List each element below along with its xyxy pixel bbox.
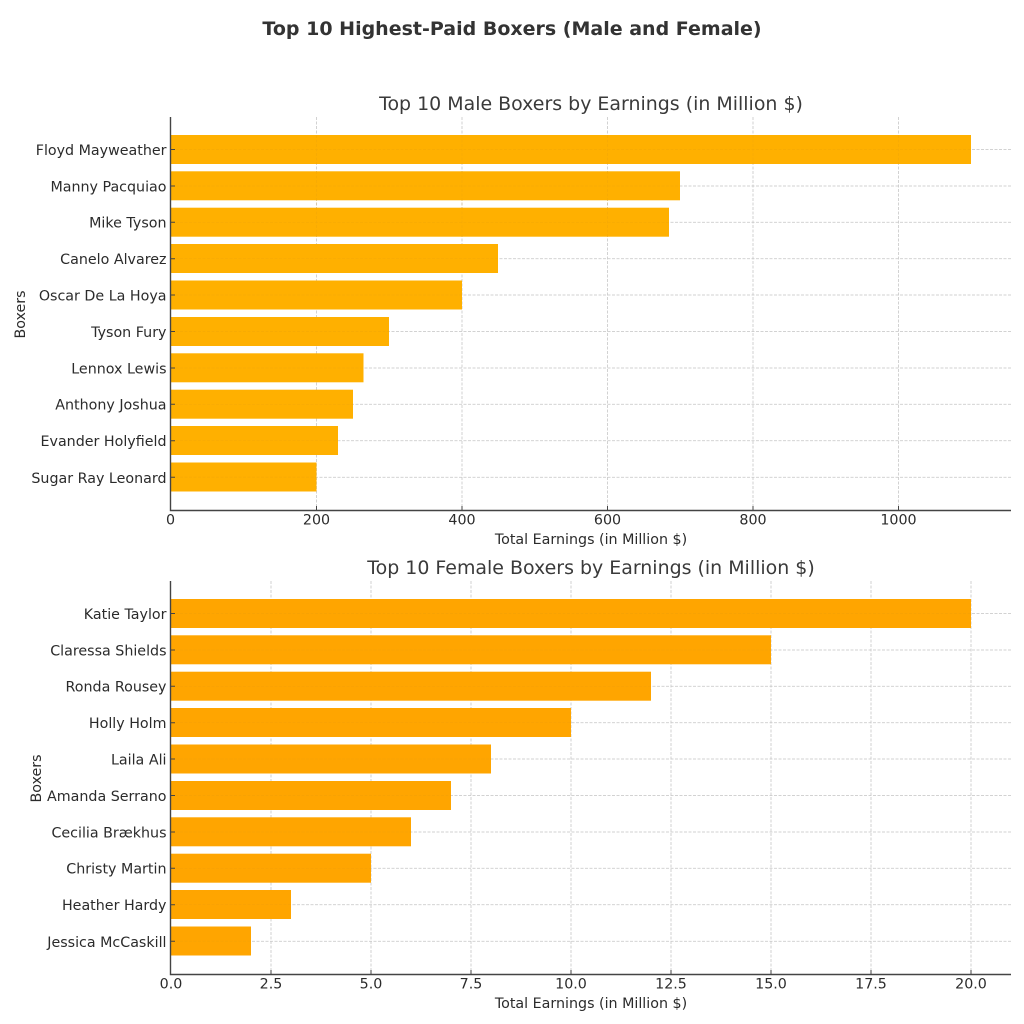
boxer labels: male: Canelo Alvarez <box>60 252 166 268</box>
x-axis tick labels: male: 600 <box>594 512 621 528</box>
x-axis tick labels: male: 800 <box>739 512 767 528</box>
boxer labels: male: Tyson Fury <box>90 325 167 341</box>
boxer labels: female: Christy Martin <box>66 862 166 878</box>
boxer labels: female: Heather Hardy <box>62 898 167 914</box>
boxer labels: male: Sugar Ray Leonard <box>31 471 166 487</box>
x-axis title: female: Total Earnings (in Million $) <box>494 996 687 1012</box>
x-axis tick labels: female: 5.0 <box>360 976 382 992</box>
boxer labels: male: Mike Tyson <box>89 216 166 232</box>
x-axis tick labels: female: 10.0 <box>555 976 587 992</box>
boxer labels: female: Ronda Rousey <box>66 680 167 696</box>
boxer labels: male: Oscar De La Hoya <box>39 288 166 304</box>
panel: female boxers chart <box>29 557 1011 1012</box>
bars: female earnings <box>171 599 971 956</box>
boxer labels: male: Floyd Mayweather <box>36 143 167 159</box>
boxer labels: female: Laila Ali <box>111 752 166 768</box>
y-axis title: female: Boxers <box>29 754 45 803</box>
x-axis tick labels: male: 200 <box>303 512 330 528</box>
x-axis tick labels: female: 17.5 <box>855 976 887 992</box>
heading: female chart: Top 10 Female Boxers by Earnings (in Million $) <box>366 557 815 579</box>
x-axis tick labels: male: 0 <box>166 512 175 528</box>
x-axis tick labels: female: 7.5 <box>460 976 482 992</box>
boxer labels: male: Anthony Joshua <box>55 398 166 414</box>
boxer labels: female: Cecilia Brækhus <box>51 825 166 841</box>
boxer labels: female <box>46 607 167 951</box>
x-axis tick labels: female: 15.0 <box>755 976 787 992</box>
boxer labels: female: Amanda Serrano <box>47 789 166 805</box>
bars: male earnings <box>171 135 971 492</box>
boxer labels: male <box>31 143 167 487</box>
x-axis tick labels: male <box>166 512 917 528</box>
boxer labels: male: Manny Pacquiao <box>50 179 166 195</box>
x-axis tick labels: female: 2.5 <box>260 976 282 992</box>
boxer labels: female: Holly Holm <box>89 716 166 732</box>
x-axis tick labels: male: 400 <box>448 512 476 528</box>
y-axis title: male: Boxers <box>13 290 29 339</box>
boxer labels: female: Katie Taylor <box>84 607 167 623</box>
heading: male chart: Top 10 Male Boxers by Earnings (in Million $) <box>378 93 803 115</box>
panel: male boxers chart <box>13 93 1011 548</box>
x-axis tick labels: female: 20.0 <box>955 976 987 992</box>
x-axis tick labels: female: 12.5 <box>655 976 687 992</box>
boxer labels: male: Evander Holyfield <box>41 434 166 450</box>
boxer labels: female: Claressa Shields <box>50 643 166 659</box>
x-axis title: male: Total Earnings (in Million $) <box>494 532 687 548</box>
x-axis tick labels: female: 0.0 <box>160 976 182 992</box>
axes: male chart <box>170 117 1011 510</box>
x-axis tick labels: male: 1000 <box>880 512 917 528</box>
boxer labels: female: Jessica McCaskill <box>46 935 166 951</box>
axes: female chart <box>170 581 1011 974</box>
x-axis tick labels: female <box>160 976 987 992</box>
boxer labels: male: Lennox Lewis <box>71 361 166 377</box>
title: Top 10 Highest-Paid Boxers (Male and Female) <box>262 18 762 40</box>
